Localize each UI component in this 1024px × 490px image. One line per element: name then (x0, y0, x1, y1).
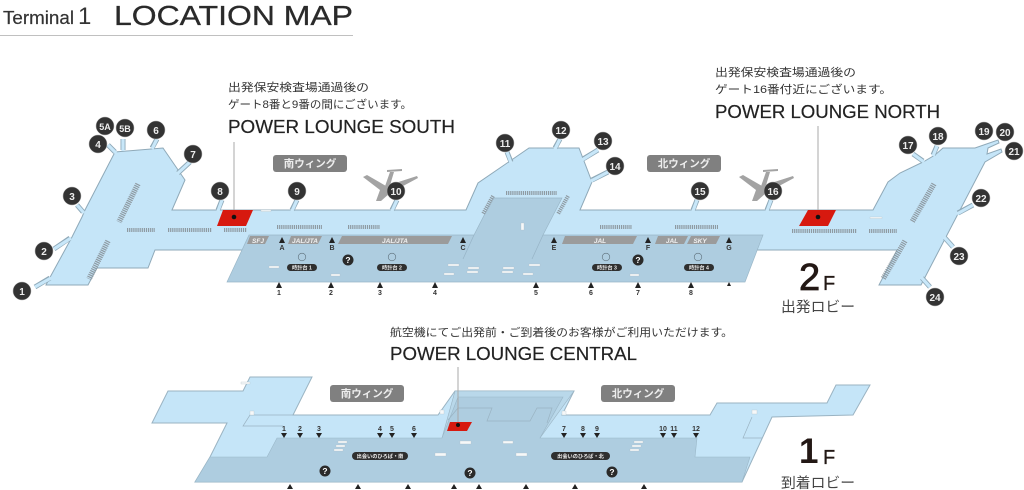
check-in counters: JAL/JTA (292, 238, 318, 245)
gate 22 (957, 189, 990, 214)
gate 12: 12 (555, 126, 567, 137)
callout: Power Lounge North: ゲート16番付近にございます。 (715, 82, 892, 96)
gate 23 (944, 237, 968, 265)
leader line south (233, 142, 235, 216)
icon: airplane near gate 16 (739, 169, 794, 201)
gate 15 (691, 182, 709, 211)
gate 24: 24 (929, 293, 941, 304)
check-in counters: JAL (594, 238, 606, 245)
entrance markers 1 to 8: 6 (589, 290, 593, 297)
wing label: south 1F: 南ウィング (341, 387, 394, 400)
gate 12 (552, 121, 570, 149)
gate 4 (89, 135, 116, 153)
gate 13 (582, 132, 612, 160)
plazas labels (352, 452, 610, 460)
gate 5B: 5B (119, 124, 131, 134)
entrance markers A to G: B (329, 245, 335, 252)
exit markers 1 to 12: 2 (298, 426, 302, 433)
check-in counters: JAL (666, 238, 678, 245)
gate 6 (147, 121, 165, 149)
leader line central (457, 367, 459, 425)
gate 21 (1005, 142, 1023, 160)
gate 10: 10 (390, 187, 402, 198)
gate 5B (116, 119, 134, 151)
clock towers: 時計台 1 (292, 264, 312, 272)
clock towers: 時計台 2 (382, 264, 402, 272)
callout: Power Lounge Central: 航空機にてご出発前・ご到着後のお客様がご利用いただけます。 (390, 325, 733, 339)
gate 16 (764, 182, 782, 211)
exit markers 1 to 12: 11 (670, 426, 678, 433)
entrance markers 1 to 8: 8 (689, 290, 693, 297)
entrance markers A to G: A (279, 245, 285, 252)
wing label: north 1F: 北ウィング (612, 387, 665, 400)
gate 11: 11 (500, 139, 511, 150)
gate 8: 8 (217, 187, 223, 198)
wing escalators 2F (89, 184, 934, 279)
entrance markers 1 to 8: 2 (329, 290, 333, 297)
exit markers 1 to 12: 5 (390, 426, 394, 433)
gate 21: 21 (1008, 147, 1020, 158)
gate 19: 19 (978, 127, 990, 138)
gate 17: 17 (902, 141, 914, 152)
gate 24 (921, 277, 944, 306)
1F inner corridor lines (243, 408, 762, 438)
gate 18: 18 (932, 132, 944, 143)
gate 13: 13 (597, 137, 609, 148)
entrance markers A to G: C (460, 245, 466, 252)
exit markers 1 to 12: 10 (659, 426, 667, 433)
exit markers 1 to 12: 7 (562, 426, 566, 433)
icon: airplane near gate 10 (363, 169, 418, 201)
gate 19 (975, 122, 993, 140)
gate 20: 20 (999, 128, 1011, 139)
gate 3 (63, 187, 84, 213)
gate 4: 4 (95, 140, 101, 151)
plazas labels: 出会いのひろば・北 (557, 452, 605, 460)
marker: Power Lounge South (217, 210, 253, 226)
gate 20 (996, 123, 1014, 141)
exit markers 1 to 12: 12 (692, 426, 700, 433)
gate 16: 16 (767, 187, 779, 198)
leader line north (817, 126, 819, 216)
floor map: 2F departures (46, 140, 1002, 297)
gate 9 (288, 182, 306, 211)
gate 1 (13, 278, 51, 300)
1F central upper band (442, 391, 574, 438)
wing label: north 1F (601, 385, 675, 402)
wing label: south 2F: 南ウィング (284, 157, 337, 170)
gate 9: 9 (294, 187, 300, 198)
gate 2: 2 (41, 247, 47, 258)
entrance markers A to G: G (726, 245, 732, 252)
entrance markers 1 to 8: 1 (277, 290, 281, 297)
check-in counters: SKY (693, 238, 707, 245)
gate 5A (96, 117, 114, 135)
entrance markers A to G (279, 237, 732, 252)
callout: Power Lounge South: 出発保安検査場通過後の (228, 80, 369, 94)
callout: Power Lounge Central: POWER LOUNGE CENTRAL (390, 344, 637, 364)
information icons 1F (320, 466, 618, 478)
gate 6: 6 (153, 126, 159, 137)
wing label: south 2F (273, 155, 347, 172)
information icons 1F: ? (609, 467, 615, 477)
1F arrival lobby (195, 397, 750, 482)
2F concourse floor (46, 140, 1002, 285)
floor label: 2F (781, 257, 855, 316)
information icons 1F: ? (467, 468, 473, 478)
callout: Power Lounge North: 出発保安検査場通過後の (715, 65, 856, 79)
floor label: 2F: 出発ロビー (781, 299, 855, 316)
plazas labels: 出会いのひろば・南 (357, 452, 403, 460)
exit markers 1 to 12: 9 (595, 426, 599, 433)
gate 14 (591, 157, 624, 181)
page title (3, 0, 353, 31)
gate 22: 22 (975, 194, 987, 205)
marker: Power Lounge Central (447, 422, 472, 431)
callout: Power Lounge South: ゲート8番と9番の間にございます。 (228, 97, 412, 111)
clock towers: 時計台 3 (597, 264, 617, 272)
small signs 2F (261, 210, 882, 276)
gate 7: 7 (190, 150, 196, 161)
callout: Power Lounge South (228, 80, 455, 137)
entrance markers 1 to 8: 4 (433, 290, 437, 297)
wing label: north 2F: 北ウィング (658, 157, 711, 170)
1F light floor (152, 377, 870, 482)
floor label: 1F: 1 (799, 432, 818, 471)
gate 11 (496, 134, 514, 163)
wing label: south 1F (330, 385, 404, 402)
callout: Power Lounge South: POWER LOUNGE SOUTH (228, 117, 455, 137)
exit markers 1 to 12: 1 (282, 426, 286, 433)
entrance markers A to G: F (646, 245, 651, 252)
entrance markers 1 to 8 (276, 282, 731, 297)
check-in counters: JAL/JTA (382, 238, 408, 245)
gate 5A: 5A (99, 122, 111, 132)
page title: Terminal (3, 8, 74, 28)
clock towers (287, 253, 714, 272)
information icons 1F: ? (322, 466, 328, 476)
callout: Power Lounge North (715, 65, 940, 122)
exit markers 1 to 12: 3 (317, 426, 321, 433)
escalators 2F (127, 193, 897, 231)
wing label: north 2F (647, 155, 721, 172)
gate 18 (929, 127, 947, 156)
page title: LOCATION MAP (114, 0, 353, 31)
marker: Power Lounge North (799, 210, 836, 226)
floor map: 1F arrivals (152, 377, 870, 489)
floor label: 1F: F (823, 447, 835, 469)
entrance markers 1 to 8: 5 (534, 290, 538, 297)
information icons 2F: ? (635, 255, 641, 265)
entrance markers 1 to 8: 3 (378, 290, 382, 297)
floor label: 1F (781, 432, 855, 490)
floor label: 2F: 2 (799, 257, 820, 299)
small signs 1F (241, 382, 757, 456)
clock towers: 時計台 4 (689, 264, 709, 272)
gate 7 (177, 145, 202, 174)
check-in counters: SFJ (252, 238, 264, 245)
gate 3: 3 (69, 192, 75, 203)
entrance markers 1 to 8: 7 (636, 290, 640, 297)
exit markers 1 to 12: 6 (412, 426, 416, 433)
exit markers 1 to 12: 8 (581, 426, 585, 433)
gate 14: 14 (609, 162, 621, 173)
check-in counters (247, 236, 720, 245)
gate 8 (211, 182, 229, 211)
callout: Power Lounge Central (390, 325, 733, 364)
bottom entrance markers (287, 484, 647, 489)
floor label: 2F: F (823, 273, 835, 295)
gate 23: 23 (953, 252, 965, 263)
gate numbers 2F (13, 117, 1023, 306)
central hall edges (463, 235, 543, 259)
gate 17 (899, 136, 924, 162)
2F departure lobby block (227, 198, 763, 282)
information icons 2F (342, 254, 644, 266)
gate 15: 15 (694, 187, 706, 198)
entrance markers A to G: E (552, 245, 557, 252)
page title: 1 (78, 3, 91, 30)
callout: Power Lounge North: POWER LOUNGE NORTH (715, 102, 940, 122)
information icons 2F: ? (345, 255, 351, 265)
exit markers 1 to 12 (281, 426, 700, 438)
gate 2 (35, 238, 71, 260)
gate 1: 1 (19, 287, 25, 298)
exit markers 1 to 12: 4 (378, 426, 382, 433)
gate 10 (387, 182, 405, 211)
